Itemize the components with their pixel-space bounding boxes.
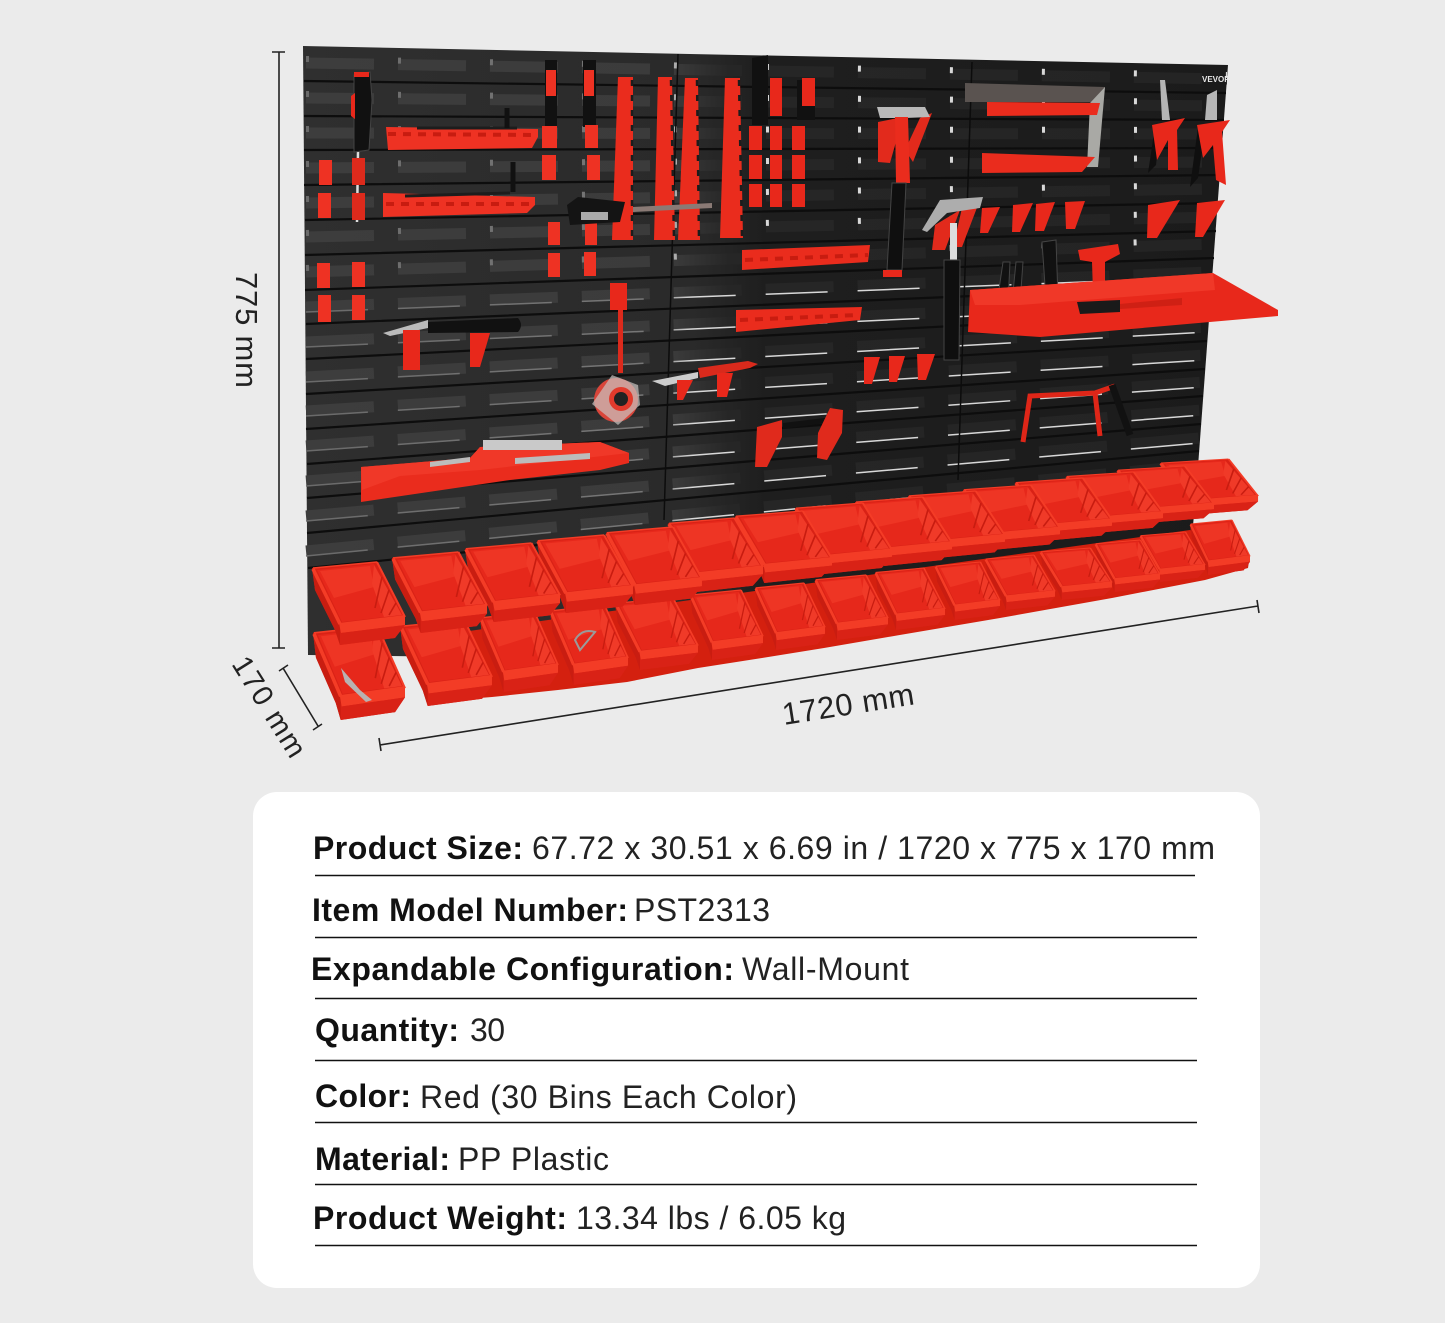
dimension: height 775 mm: 775 mm (229, 272, 264, 388)
left shelf with sockets (361, 440, 629, 502)
tools standing on right shelf (997, 240, 1120, 303)
dimension: height 775 mm (229, 52, 285, 648)
pegboard panel (303, 46, 1228, 660)
socket rails (383, 108, 538, 217)
hanging screwdrivers (542, 60, 600, 180)
socket rails centre (736, 245, 870, 332)
spec: product size: 67.72 x 30.51 x 6.69 in / 1720 x 775 x 170 mm (532, 830, 1215, 866)
tools on pegboard right section (736, 75, 1278, 467)
spec: material: Material: (315, 1141, 450, 1177)
screwdriver and holders (351, 72, 372, 222)
dimension: width 1720 mm: 1720 mm (780, 677, 916, 732)
spec: product size (313, 830, 1215, 876)
spec: quantity: Quantity: (315, 1012, 459, 1048)
pliers (1148, 80, 1230, 187)
spec: material: PP Plastic (458, 1141, 609, 1177)
spec: expandable configuration: Wall-Mount (742, 951, 909, 987)
spec: color: Red (30 Bins Each Color) (420, 1079, 797, 1115)
tools on pegboard left section (317, 55, 815, 502)
storage bins top row (312, 459, 1258, 645)
tape measure (592, 283, 640, 425)
caliper (567, 197, 712, 225)
spec: quantity: 30 (470, 1012, 505, 1048)
dimension: width 1720 mm (379, 600, 1259, 751)
dimension: depth 170 mm: 170 mm (225, 651, 312, 764)
spec: item model number: PST2313 (634, 892, 770, 928)
red frame tool (1023, 385, 1130, 442)
triangular hooks (864, 200, 1225, 384)
spec: item model number (312, 892, 1197, 938)
centre lower hooks with bar (755, 408, 843, 467)
mid clips with screwdrivers (749, 55, 815, 207)
hammer one (877, 107, 932, 277)
VEVOR logo: VEVOR (1202, 75, 1230, 84)
spec: quantity (315, 1012, 1197, 1060)
spec: product weight (313, 1200, 1197, 1246)
square ruler with rails (965, 83, 1105, 173)
spec: item model number: Item Model Number: (312, 892, 628, 928)
wrench on hooks (383, 318, 521, 370)
spec: color: Color: (315, 1078, 411, 1114)
adjustable wrench (652, 361, 758, 400)
tall red rails (612, 77, 743, 240)
hammer two (922, 197, 983, 360)
spec: product weight: Product Weight: (313, 1200, 567, 1236)
right shelf (968, 273, 1278, 337)
spec: expandable configuration (311, 951, 1197, 998)
storage bins bottom row (313, 520, 1250, 720)
spec: product size: Product Size: (313, 830, 523, 866)
spec: material (315, 1141, 1197, 1184)
specification card (253, 792, 1260, 1288)
small clips (317, 160, 597, 322)
spec: product weight: 13.34 lbs / 6.05 kg (576, 1200, 846, 1236)
spec: expandable configuration: Expandable Configuration: (311, 951, 734, 987)
spec: color (315, 1078, 1197, 1122)
